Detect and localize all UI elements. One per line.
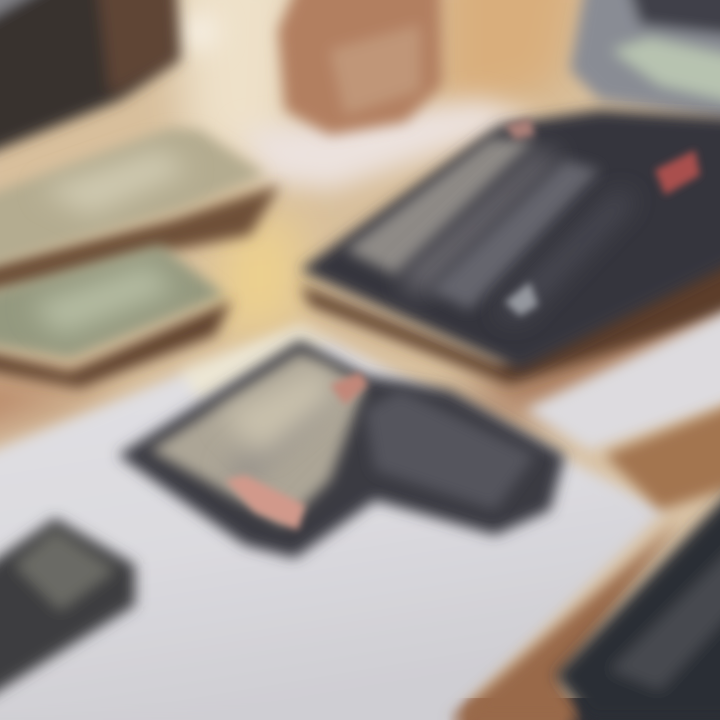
cream calculator left [0,128,280,300]
bottom edge base [0,698,720,720]
dark object bottom left [0,518,135,715]
large dark calculator [300,110,720,385]
white paper right [525,290,720,450]
brown glass object top centre [278,0,442,135]
white paper lower [0,325,665,720]
pink button upper [330,372,368,405]
beige key rows [345,138,535,275]
green calculator left [0,245,232,388]
phone-like calculator centre [118,340,565,558]
dark object top left [0,0,180,165]
wood right [450,390,720,720]
white glow behind glass [182,14,540,190]
dark device top right [570,0,720,125]
light key [505,282,538,316]
dark calculator bottom right [555,450,720,720]
red button [655,150,700,195]
wooden desk background [0,0,720,440]
pink button lower [225,475,305,530]
